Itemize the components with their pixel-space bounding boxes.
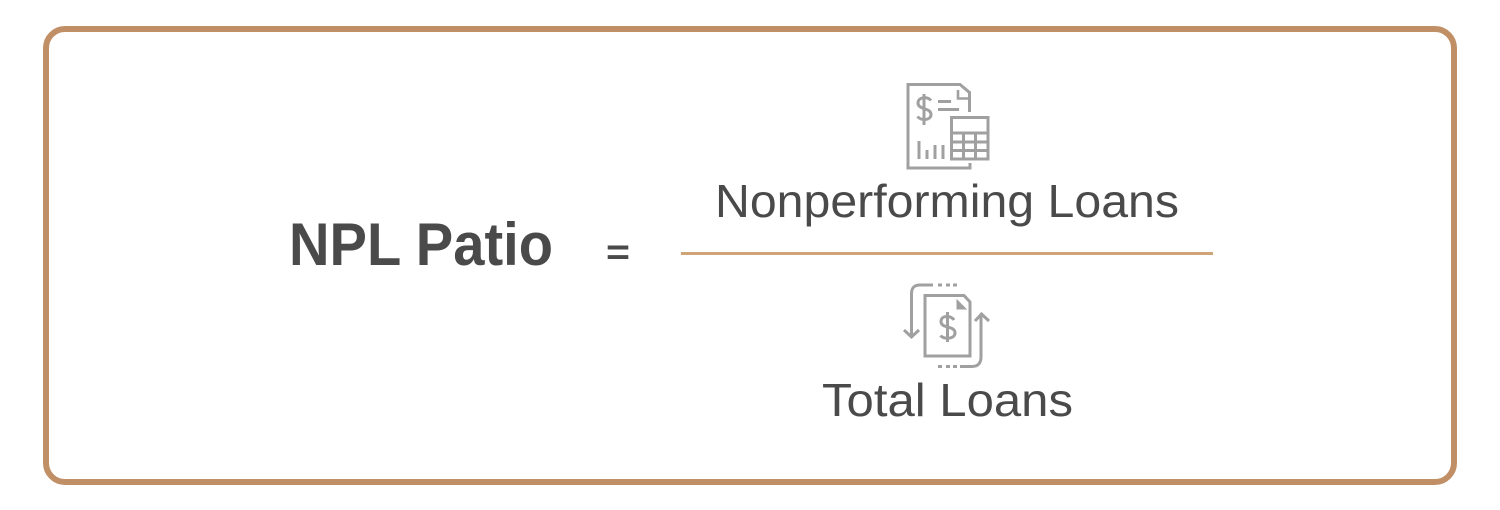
heading: NPL Patio: NPL Patio	[289, 211, 553, 278]
icon: document with dollar and circulating arrows	[904, 285, 989, 366]
icon: financial document with calculator	[908, 84, 988, 168]
numerator: Nonperforming Loans: Nonperforming Loans	[715, 175, 1179, 227]
equals sign: =	[606, 231, 630, 272]
fraction line	[681, 252, 1213, 255]
denominator: Total Loans: Total Loans	[822, 374, 1073, 426]
